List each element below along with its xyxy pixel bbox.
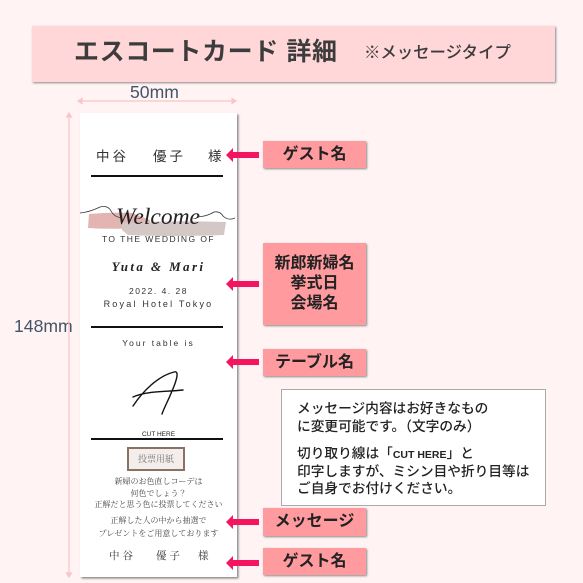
- height dimension label: 148mm: [14, 316, 73, 336]
- callout: notes: [281, 389, 546, 506]
- table letter script: [132, 371, 184, 415]
- subtitle: ※メッセージタイプ: [364, 44, 511, 62]
- guest name: [96, 149, 222, 164]
- bottom guest name: 様: [198, 551, 208, 562]
- title banner: [32, 26, 555, 82]
- flourish lines: [80, 206, 235, 219]
- label: bottom guest name: [263, 548, 366, 575]
- note: cut line: ご自身でお付けください。: [297, 481, 461, 496]
- prize message: プレゼントをご用意しております: [99, 528, 218, 538]
- note: cut line: 印字しますが、ミシン目や折り目等は: [297, 464, 529, 478]
- quiz message: 正解だと思う色に投票してください: [94, 500, 222, 509]
- width dimension arrow: [77, 98, 237, 104]
- quiz message: 何色でしょう？: [130, 488, 186, 498]
- note: message content: [297, 401, 488, 434]
- bottom guest name: 中谷: [109, 551, 136, 562]
- label: message: [263, 508, 366, 536]
- note: message content: に変更可能です。（文字のみ）: [297, 419, 480, 434]
- table caption: Your table is: [122, 338, 195, 348]
- wedding line: TO THE WEDDING OF: [102, 234, 215, 244]
- arrow: couple details: [226, 277, 259, 291]
- couple names: Yuta & Mari: [112, 259, 205, 274]
- label: table name: [263, 349, 366, 376]
- arrow: bottom guest name: [226, 556, 259, 570]
- label: couple details: 挙式日: [290, 275, 338, 292]
- width dimension label: 50mm: [130, 82, 179, 102]
- label: guest name: ゲスト名: [282, 146, 346, 162]
- height dimension arrow: [66, 112, 72, 578]
- welcome artwork: [80, 204, 236, 236]
- bottom guest name: [109, 550, 208, 562]
- label: couple details: [263, 243, 366, 325]
- label: couple details: 新郎新婦名: [274, 255, 354, 272]
- label: bottom guest name: ゲスト名: [282, 552, 346, 570]
- quiz message: [94, 477, 222, 509]
- guest name: 優子: [153, 149, 186, 164]
- guest name: 様: [208, 149, 222, 164]
- label: table name: テーブル名: [275, 354, 354, 370]
- panel: escort card: [80, 113, 237, 577]
- note: cut line: 切り取り線は「CUT HERE」と: [297, 446, 474, 461]
- arrow: guest name: [226, 148, 259, 162]
- cut here text: CUT HERE: [142, 431, 175, 438]
- voting ticket label: [127, 447, 185, 471]
- note: cut line: [297, 446, 529, 496]
- date: 2022. 4. 28: [129, 286, 188, 296]
- brush strokes: [88, 213, 226, 236]
- quiz message: 新婦のお色直しコーデは: [114, 477, 202, 486]
- welcome script: Welcome: [116, 204, 200, 229]
- cut rule: [91, 438, 223, 440]
- prize message: [99, 516, 218, 538]
- bottom guest name: 優子: [156, 551, 183, 562]
- label: message: メッセージ: [275, 513, 354, 530]
- guest name: 中谷: [96, 149, 129, 164]
- label: guest name: [263, 141, 366, 168]
- voting ticket label: 投票用紙: [138, 454, 174, 464]
- venue rule: [91, 326, 223, 328]
- guest name rule: [91, 175, 223, 177]
- label: couple details: 会場名: [290, 295, 338, 312]
- venue: Royal Hotel Tokyo: [104, 299, 213, 309]
- arrow: table name: [226, 355, 259, 369]
- title: エスコートカード 詳細: [74, 38, 338, 66]
- arrow: message: [226, 515, 259, 529]
- note: message content: メッセージ内容はお好きなもの: [297, 401, 488, 416]
- prize message: 正解した人の中から抽選で: [110, 516, 206, 525]
